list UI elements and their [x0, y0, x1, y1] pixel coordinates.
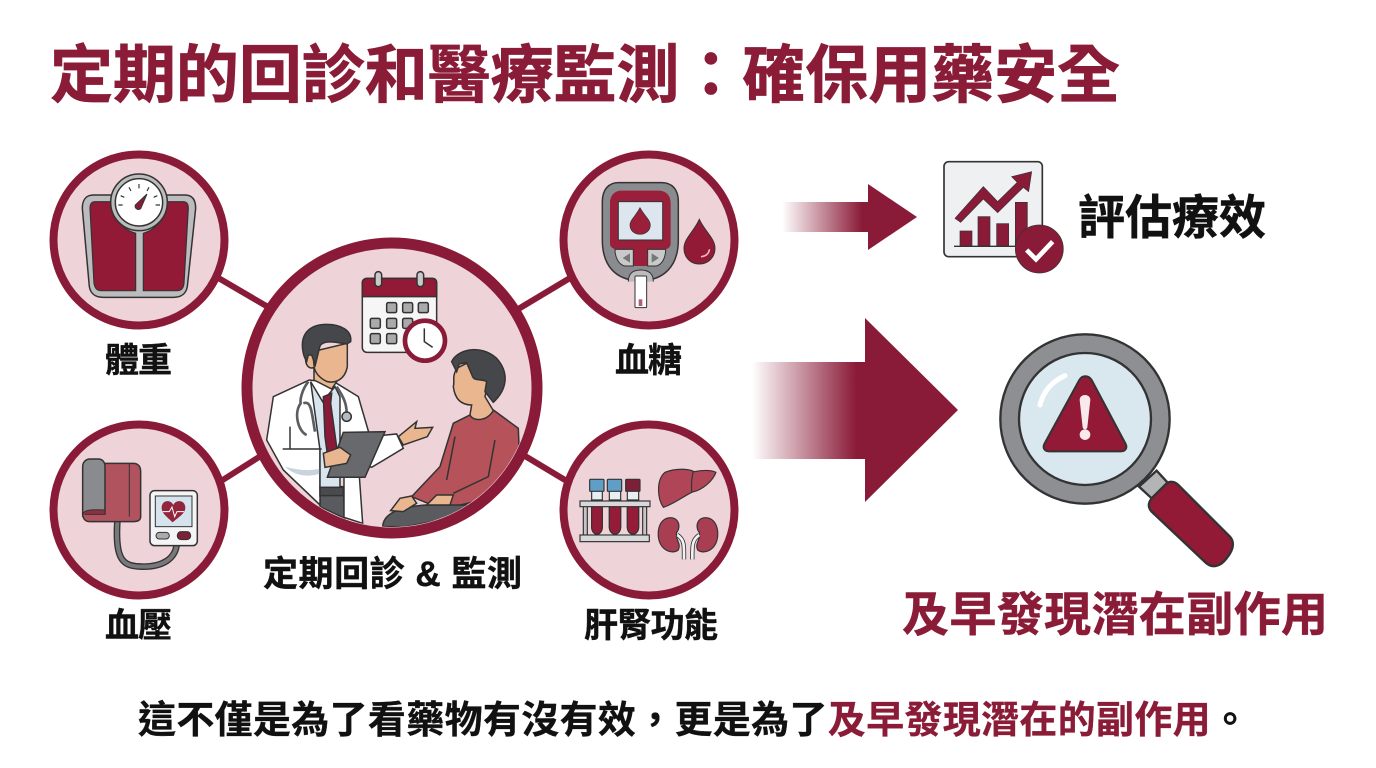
panel: regular follow-up and monitoring [247, 243, 537, 594]
icon: magnifier with warning triangle [1000, 334, 1233, 566]
title: 定期的回診和醫療監測：確保用藥安全 [50, 41, 1120, 111]
arrow: large, to side effect detection [752, 318, 958, 502]
icon: bathroom scale [82, 174, 196, 297]
label: blood glucose: 血糖 [615, 342, 682, 380]
panel: blood glucose [564, 154, 734, 380]
label: liver and kidney function: 肝腎功能 [584, 607, 718, 645]
icon: test tubes, liver, kidneys [580, 469, 718, 559]
illustration: doctor, patient and calendar [267, 272, 519, 527]
figure: doctor [267, 324, 433, 523]
bottom statement: 這不僅是為了看藥物有沒有效，更是為了及早發現潛在的副作用。 [138, 700, 1249, 742]
label: blood pressure: 血壓 [105, 607, 172, 645]
label: regular follow-up and monitoring: 定期回診 & 監測 [263, 555, 522, 594]
icon: rising chart with check badge [944, 162, 1063, 273]
heading: treatment evaluation: 評估療效 [1078, 191, 1266, 244]
panel: liver and kidney function [564, 424, 734, 645]
panel: blood pressure [54, 424, 224, 645]
arrow: small, to treatment evaluation [782, 184, 917, 250]
panel: scale / weight [54, 154, 224, 380]
figure: patient [383, 350, 519, 527]
connector lines [215, 276, 570, 483]
icon: calendar and clock [362, 272, 445, 361]
heading: early detection of side effects: 及早發現潛在副作用 [902, 588, 1328, 641]
label: weight: 體重 [105, 342, 172, 380]
icon: blood pressure cuff and monitor [83, 459, 197, 567]
icon: glucose meter and drop [602, 183, 715, 308]
